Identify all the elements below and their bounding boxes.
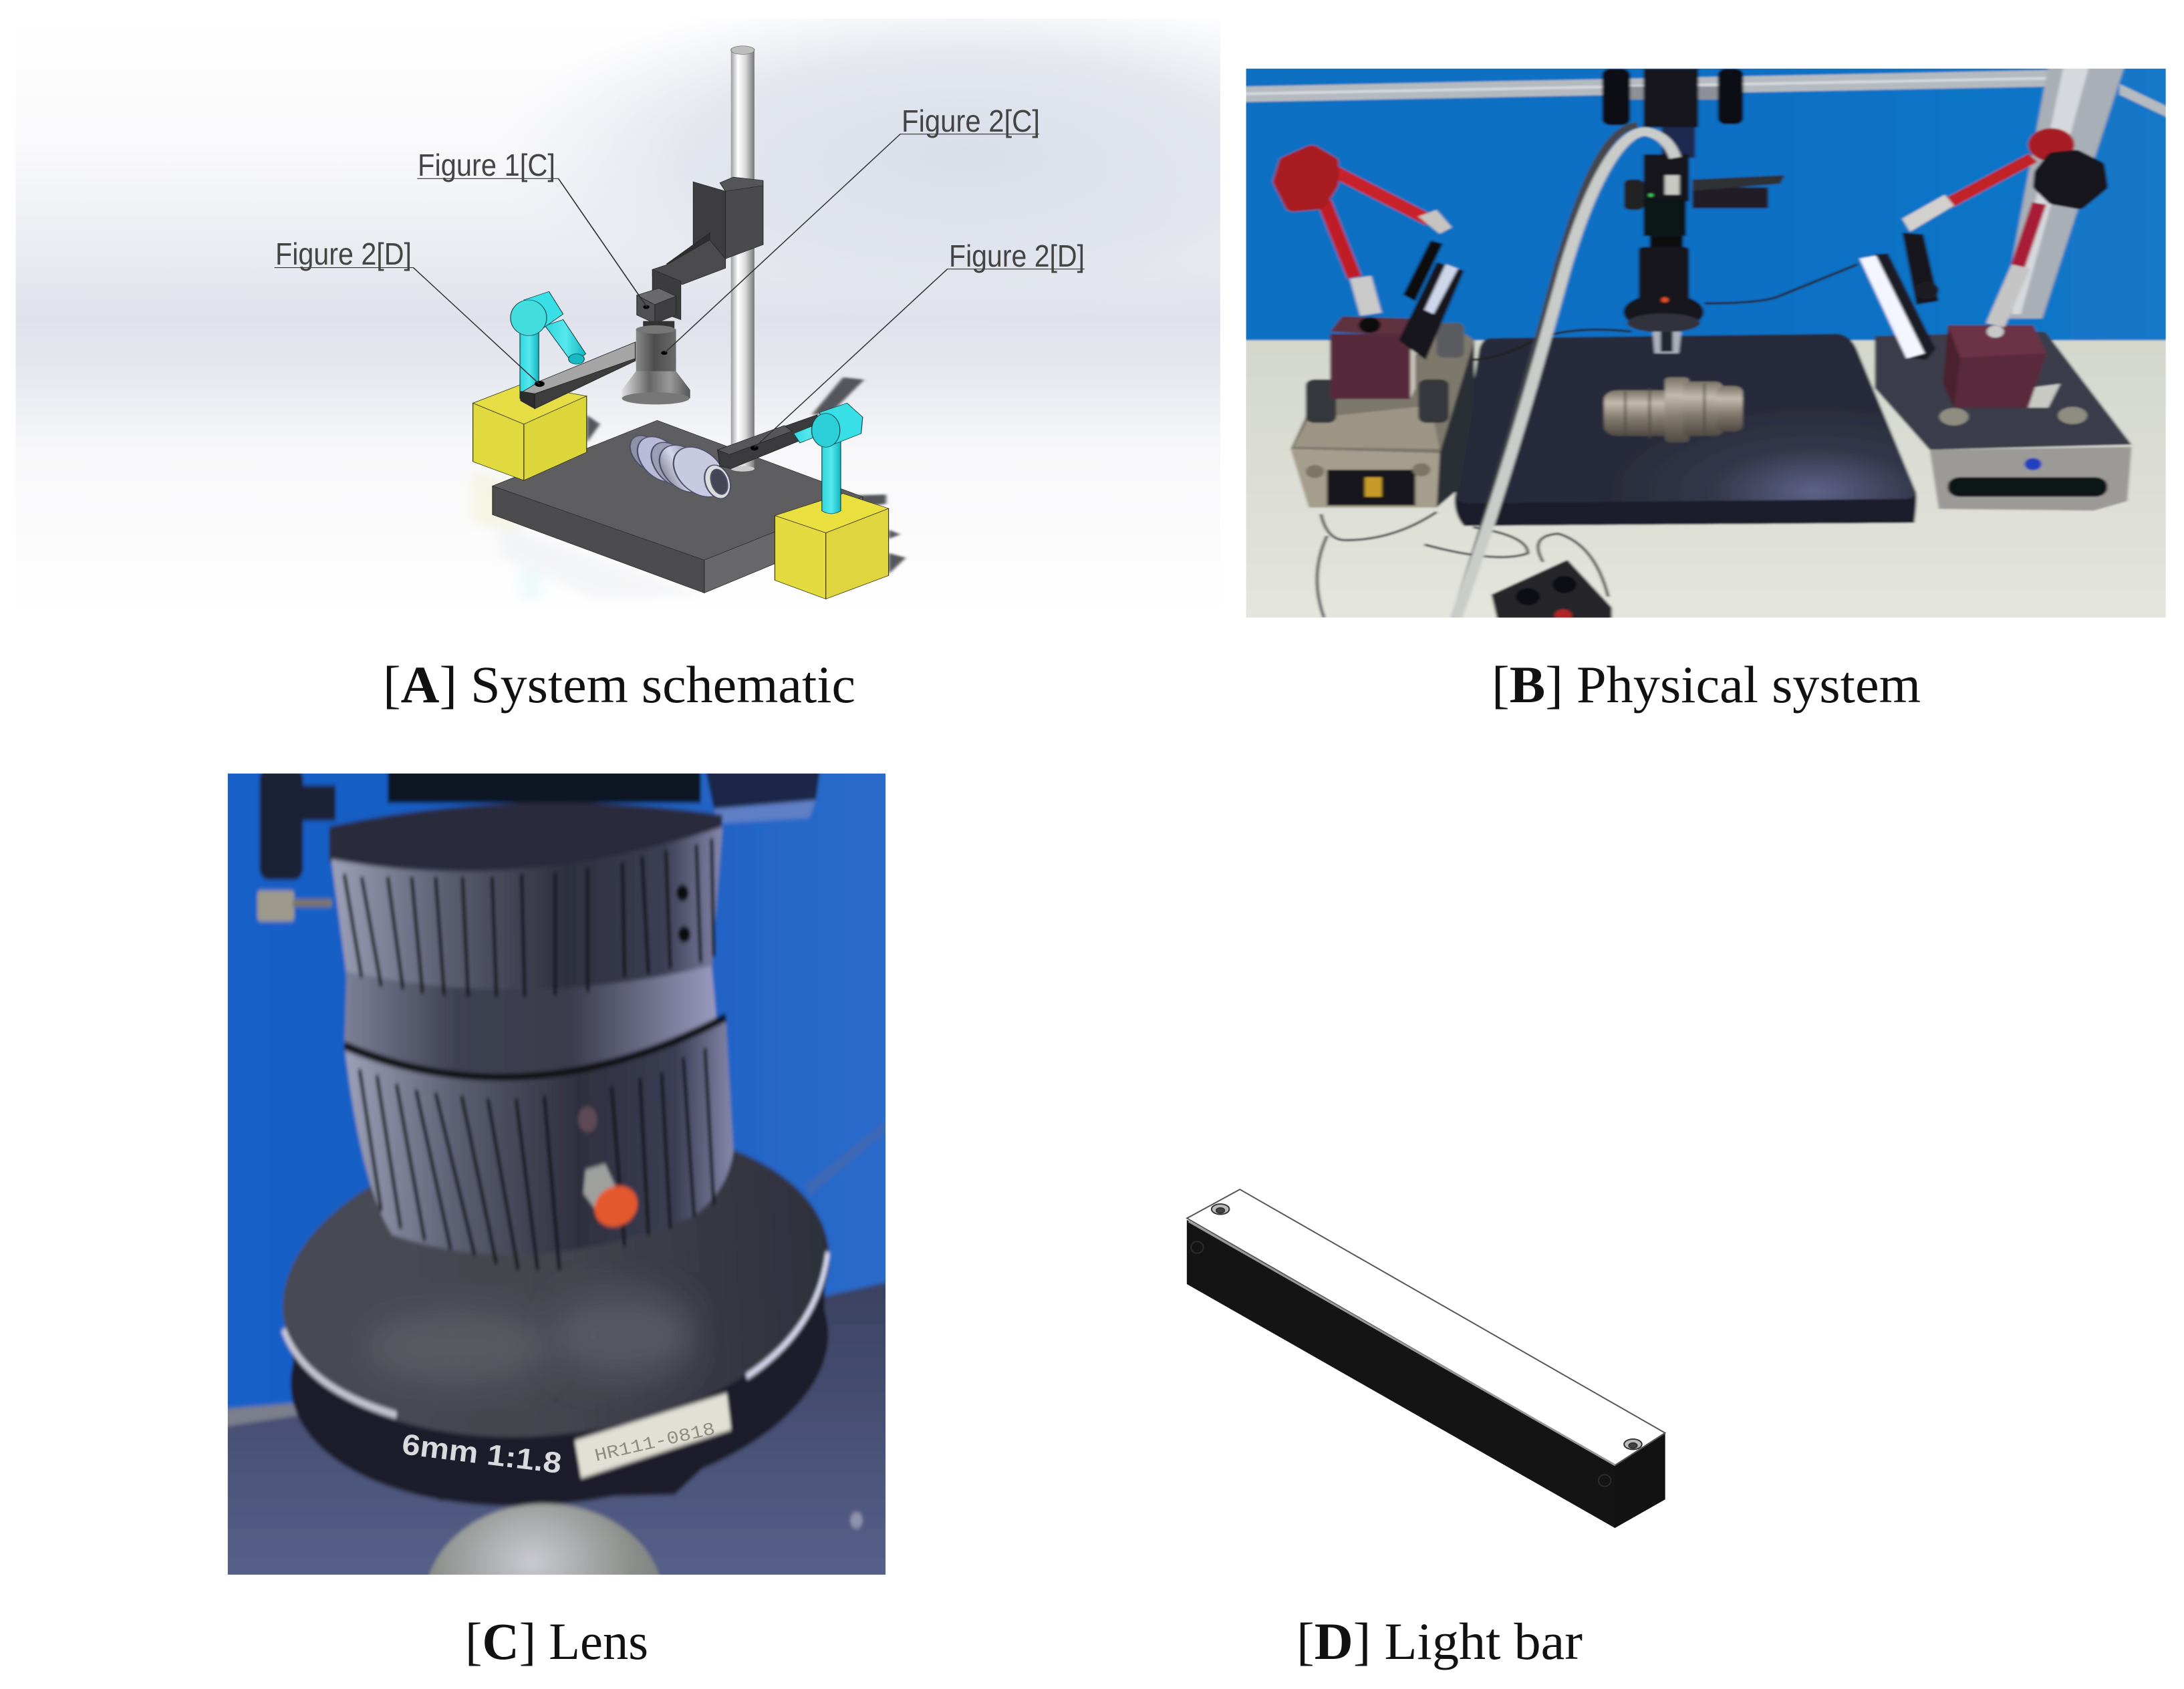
aluminium frame [1242, 67, 2170, 319]
lower ring groove [344, 1017, 726, 1078]
red marker dot [578, 1106, 640, 1231]
lens focal marking: 6mm 1:1.8 [400, 1428, 563, 1480]
dimmer control box [1492, 560, 1612, 621]
light bar long side [1187, 1220, 1615, 1528]
right red arm [1902, 128, 2100, 325]
upper focus ring [331, 826, 722, 991]
table top [1242, 340, 2170, 621]
right illuminated light bar [1860, 233, 1939, 360]
panel D: light bar drawing [1187, 1189, 1665, 1528]
mounting holes [1212, 1204, 1642, 1449]
callout: Figure 2[D] right: Figure 2[D] [949, 239, 1085, 273]
metal plate [493, 420, 863, 593]
industrial camera [1624, 154, 1785, 236]
vertical pole [731, 46, 755, 472]
lens barrel collar [329, 802, 722, 872]
panel C: lens photo [223, 768, 892, 1689]
right maroon block [1943, 325, 2046, 408]
right magnetic base [1875, 331, 2132, 510]
table surface [223, 1282, 888, 1583]
callout: Figure 2[D] left: Figure 2[D] [275, 237, 412, 271]
leader lines and underlines [275, 134, 1085, 448]
panel B: physical system photo [1242, 67, 2170, 621]
caption B: [B] Physical system [1492, 655, 1921, 714]
light bar end face [1615, 1434, 1665, 1528]
blue backdrop [223, 768, 892, 1583]
caption C: [C] Lens [465, 1612, 648, 1670]
schematic background [16, 165, 1220, 446]
camera white cable [1455, 125, 1675, 617]
lens label [575, 1393, 731, 1479]
caption D: [D] Light bar [1296, 1612, 1583, 1670]
left light and bracket [1399, 241, 1464, 360]
top dark hardware [259, 768, 820, 880]
lens flange disk [274, 1100, 838, 1532]
workpiece photo [1604, 377, 1743, 442]
light cables [1317, 264, 1858, 617]
left cyan arm [511, 291, 586, 398]
left maroon block [1330, 317, 1415, 399]
right light bar [718, 415, 817, 469]
left yellow magnet block [473, 384, 587, 480]
left red arm [1281, 151, 1452, 333]
caption A: [A] System schematic [383, 655, 855, 714]
blue wall [1242, 67, 2170, 345]
lower ring ridges [360, 1048, 714, 1270]
side screw marks [1191, 1241, 1611, 1487]
light bar edge highlight [1189, 1221, 1615, 1465]
upper ring ridges [344, 838, 714, 997]
middle barrel [344, 965, 718, 1084]
camera mount and knobs [1602, 69, 1744, 158]
silver workpiece [424, 1504, 664, 1689]
callout: Figure 2[C]: Figure 2[C] [902, 104, 1040, 138]
lens set screw holes [676, 885, 690, 943]
right yellow magnet block [775, 494, 889, 599]
camera clamp bracket [652, 177, 763, 319]
lens on stand [1623, 236, 1703, 353]
left magnetic base [1290, 323, 1474, 508]
lower aperture ring [345, 1022, 733, 1255]
right cyan arm [794, 403, 863, 514]
left light bar [521, 342, 636, 409]
background glow [576, 19, 1220, 259]
left posts [1306, 323, 1464, 423]
base plate [1455, 334, 1917, 526]
reflected cable streak [805, 1122, 887, 1196]
camera body [637, 288, 676, 323]
light bar top face [1187, 1189, 1665, 1465]
drop shadows [587, 377, 906, 574]
lens serial label: HR111-0818 [593, 1420, 717, 1467]
panel A: system schematic [16, 19, 1220, 600]
inspected workpiece [630, 436, 731, 499]
callout: Figure 1[C]: Figure 1[C] [418, 148, 555, 182]
lens assembly [622, 321, 690, 404]
floor reflection [470, 473, 663, 600]
thumbscrew [257, 891, 332, 921]
